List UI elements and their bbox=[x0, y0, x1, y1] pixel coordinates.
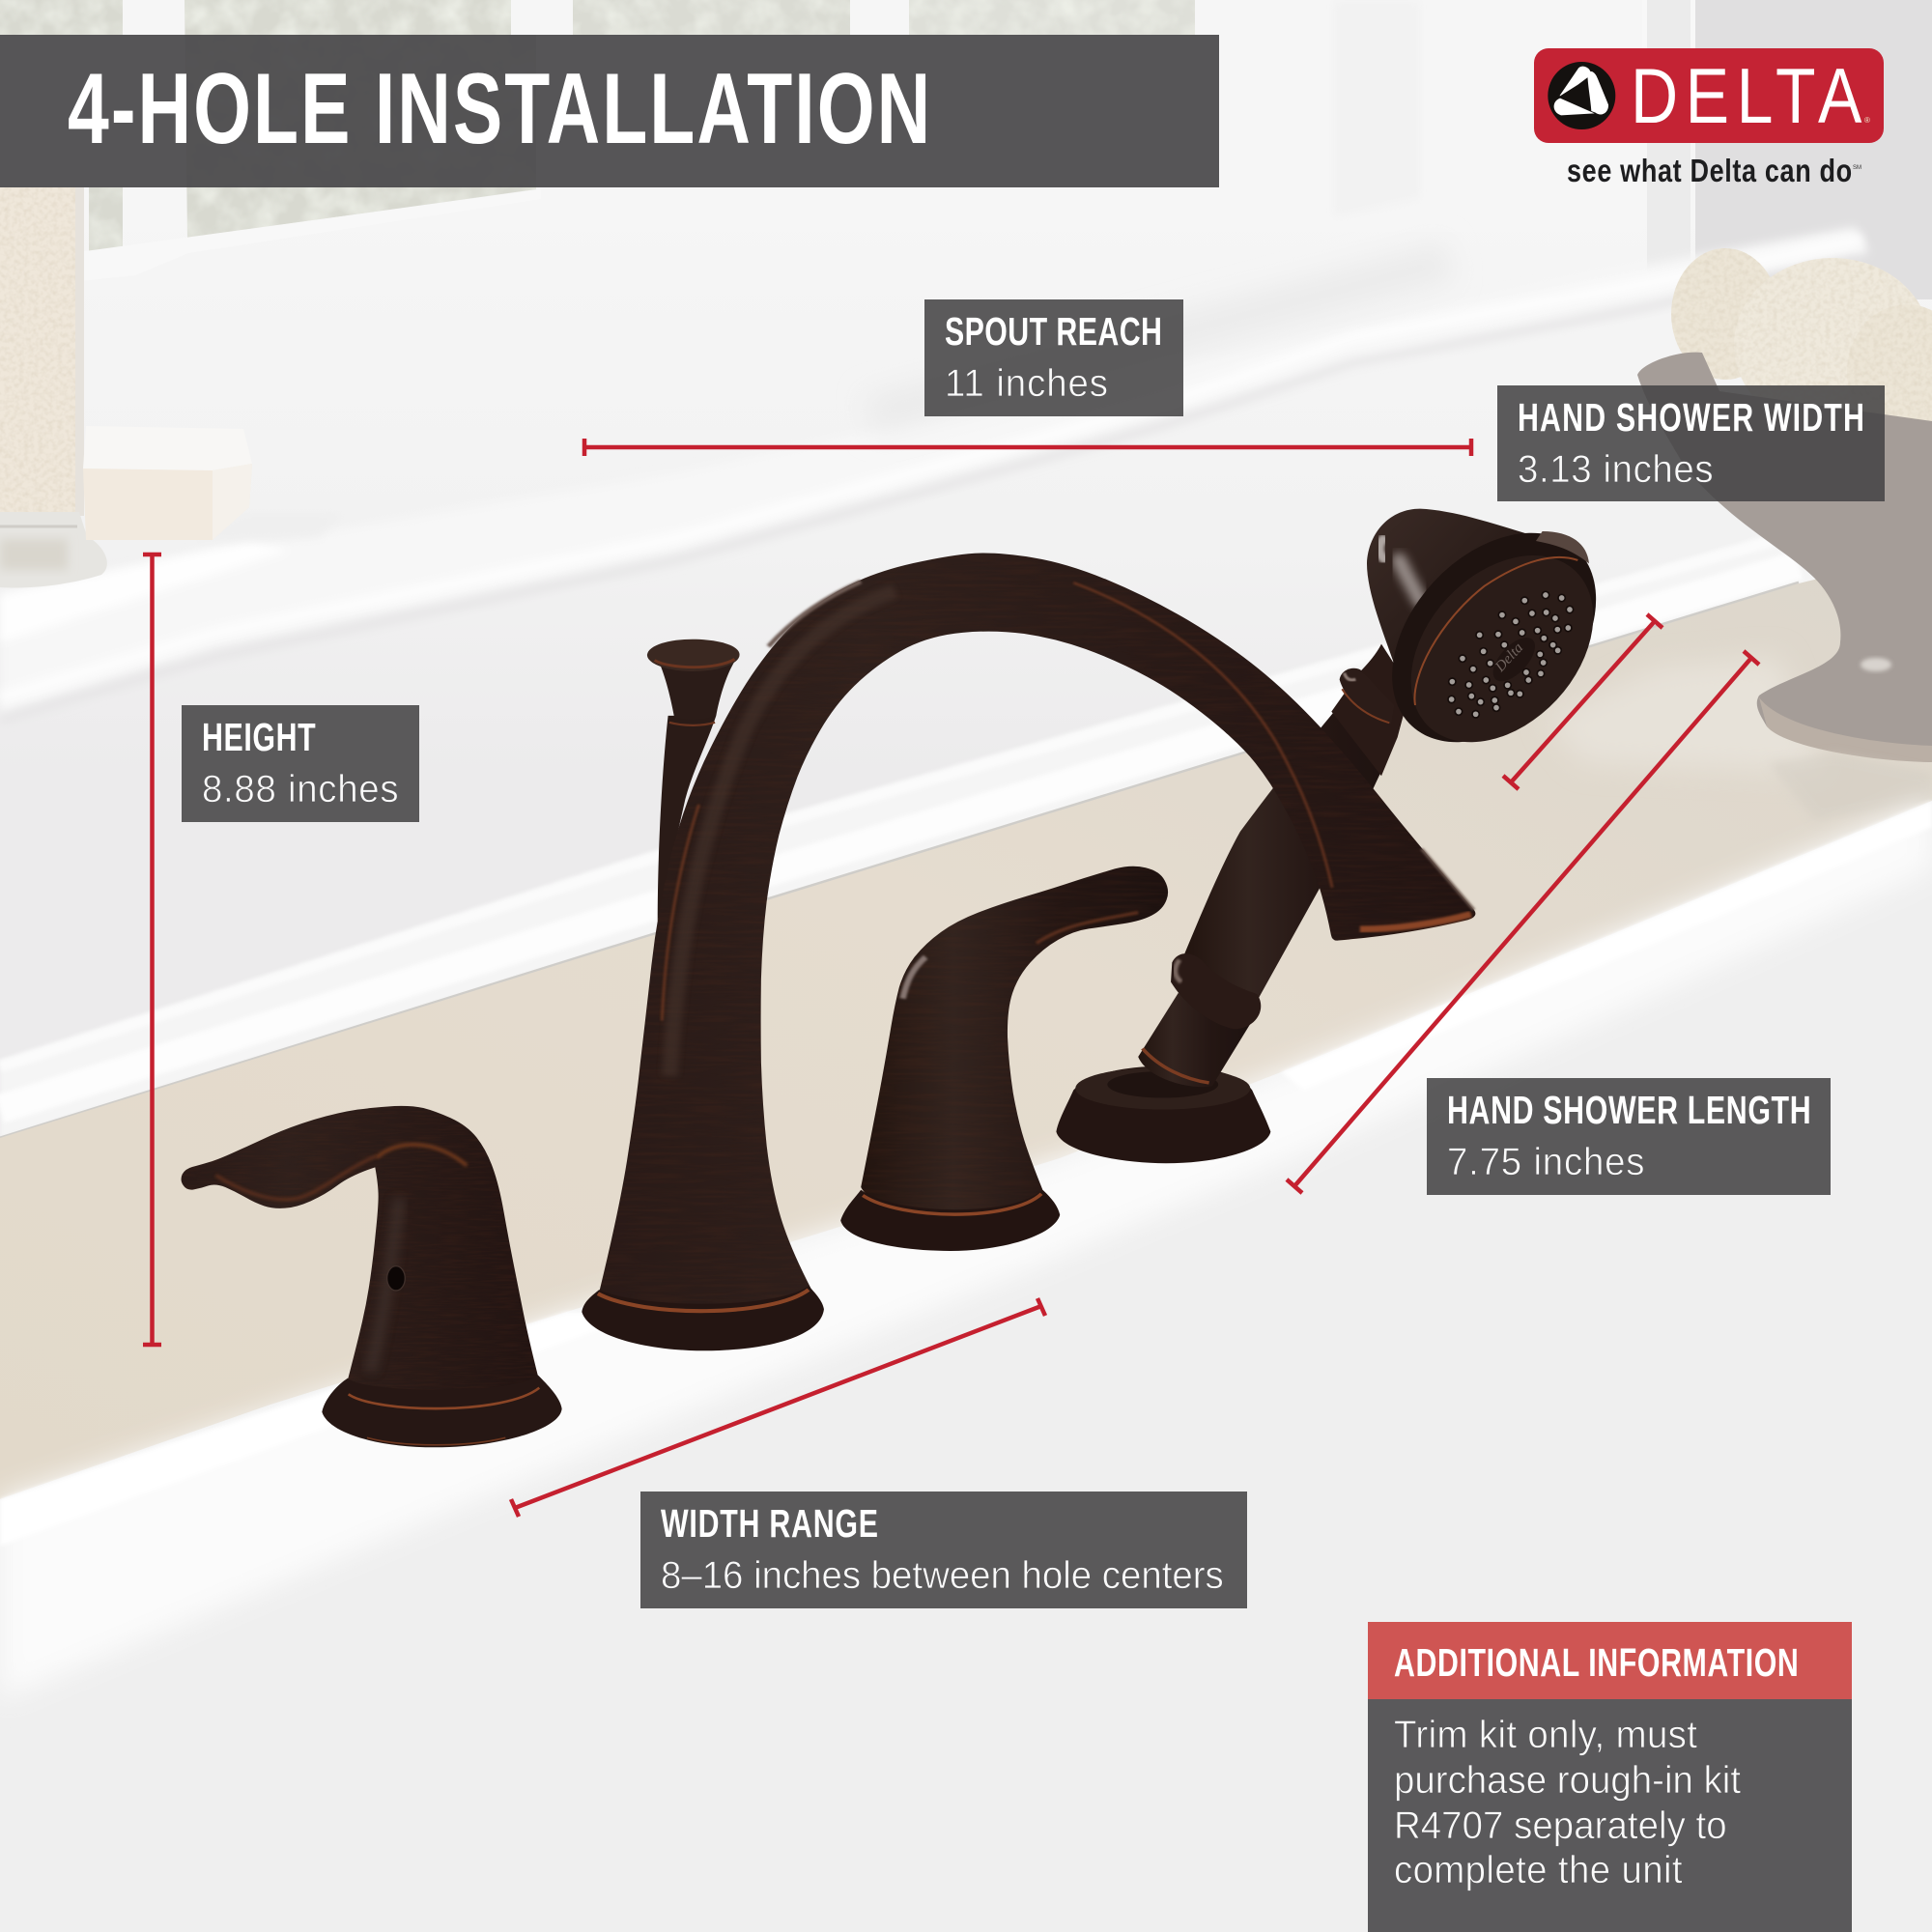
label: hand shower width: 3.13 inches bbox=[1518, 448, 1714, 491]
label: spout reach bbox=[924, 299, 1183, 416]
title bar bbox=[0, 35, 1219, 187]
label: hand shower length bbox=[1427, 1078, 1831, 1195]
main spout bbox=[582, 554, 1475, 1350]
spout flange bbox=[582, 1286, 824, 1350]
label: width range: 8–16 inches between hole centers bbox=[661, 1554, 1224, 1597]
label: width range: WIDTH RANGE bbox=[661, 1500, 878, 1546]
Delta logo bbox=[1534, 48, 1884, 189]
panel body: Trim kit only, must bbox=[1394, 1714, 1697, 1756]
logo emblem bbox=[1548, 62, 1615, 129]
left handle flange bbox=[322, 1375, 562, 1447]
panel body: R4707 separately to bbox=[1394, 1804, 1727, 1847]
title: 4-HOLE INSTALLATION bbox=[68, 53, 930, 165]
tagline: see what Delta can do bbox=[1567, 155, 1852, 189]
set screw hole bbox=[387, 1266, 405, 1291]
glass jar with sand bbox=[0, 187, 107, 587]
label: height: 8.88 inches bbox=[202, 768, 399, 810]
brand button: Delta bbox=[1492, 639, 1526, 675]
face bbox=[1375, 520, 1630, 778]
label: height bbox=[182, 705, 419, 822]
label: height: HEIGHT bbox=[202, 714, 316, 759]
label: spout reach: SPOUT REACH bbox=[945, 308, 1162, 354]
spout body bbox=[599, 554, 1475, 1309]
width range dimension line bbox=[511, 1298, 1045, 1517]
bowl with loofah bbox=[1637, 248, 1932, 821]
Delta logo: ® bbox=[1864, 116, 1870, 125]
wand lower bbox=[1138, 993, 1252, 1087]
right handle flange bbox=[840, 1190, 1060, 1251]
wand upper bbox=[1184, 712, 1398, 999]
label: spout reach: 11 inches bbox=[945, 362, 1108, 405]
hand shower length dimension line bbox=[1287, 651, 1759, 1193]
label: hand shower width bbox=[1497, 385, 1885, 501]
label: hand shower length: 7.75 inches bbox=[1447, 1141, 1644, 1183]
window panes bbox=[0, 0, 1932, 299]
copper streaks bbox=[662, 805, 698, 1021]
right handle bbox=[840, 867, 1168, 1251]
left handle bbox=[182, 1106, 562, 1447]
label: hand shower width: HAND SHOWER WIDTH bbox=[1518, 394, 1864, 440]
bell bbox=[1367, 509, 1529, 683]
brand button bbox=[1486, 631, 1543, 689]
spray nozzles bbox=[1448, 591, 1574, 718]
panel: additional information bbox=[1368, 1622, 1852, 1932]
hand shower width dimension line bbox=[1503, 614, 1662, 789]
spout left sheen bbox=[670, 591, 895, 1076]
beige counter bbox=[0, 551, 1932, 1499]
label: hand shower length: HAND SHOWER LENGTH bbox=[1447, 1087, 1811, 1132]
neck bbox=[1331, 644, 1410, 776]
window sill bbox=[0, 227, 1869, 720]
panel heading: ADDITIONAL INFORMATION bbox=[1394, 1639, 1799, 1685]
rim bbox=[1351, 494, 1636, 781]
soap block bbox=[83, 426, 252, 540]
hand shower wand and holder bbox=[1056, 712, 1398, 1163]
hand shower head bbox=[1331, 494, 1636, 781]
spout reach dimension line bbox=[584, 439, 1471, 456]
label: width range bbox=[640, 1492, 1247, 1608]
wand collar bbox=[1171, 953, 1261, 1029]
copper ring bbox=[1414, 557, 1577, 705]
holder base bbox=[1056, 1066, 1270, 1163]
wordmark: DELTA bbox=[1631, 51, 1861, 139]
panel body: complete the unit bbox=[1394, 1849, 1683, 1891]
lift rod bbox=[647, 639, 740, 921]
Delta logo: SM bbox=[1853, 165, 1861, 171]
bathtub deck bbox=[0, 801, 1932, 1932]
height dimension line bbox=[143, 554, 161, 1345]
lower wall molding bbox=[0, 493, 1932, 1138]
panel body: purchase rough-in kit bbox=[1394, 1759, 1741, 1802]
panel body bbox=[1394, 1714, 1741, 1891]
